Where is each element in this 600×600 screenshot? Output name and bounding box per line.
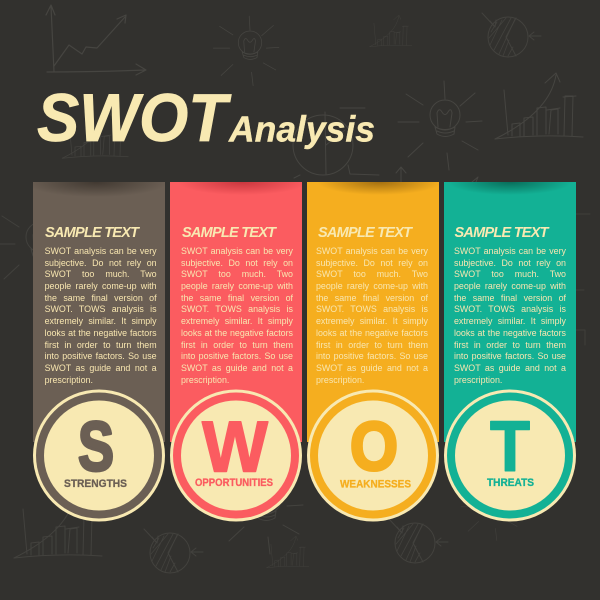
text block: strengths: prescription. [45, 375, 93, 385]
text block: weaknesses: first in order to turn them [316, 340, 428, 350]
text block: threats: SWOT. TOWS analysis is [454, 304, 566, 314]
text block: strengths: people rarely come-up with [45, 281, 157, 291]
sketch: pie chart top [482, 13, 541, 57]
sketch: marks right margin [576, 214, 590, 345]
title: Analysis [228, 108, 375, 150]
text block: threats: prescription. [454, 375, 502, 385]
panel: threats [444, 182, 576, 522]
text block: threats: SWOT analysis can be very [454, 246, 566, 256]
text block: strengths: SWOT too much. Two [45, 269, 157, 279]
text block: weaknesses: SWOT analysis can be very [316, 246, 428, 256]
sketch: pie chart lower right [389, 519, 448, 563]
text block: strengths: looks at the negative factors [45, 328, 157, 338]
title: SWOT [37, 80, 232, 156]
badge: W opportunities: OPPORTUNITIES [195, 477, 273, 489]
text block: strengths: SWOT analysis can be very [45, 246, 157, 256]
sketch: arrows above panels [396, 167, 478, 182]
panel: opportunities [170, 182, 302, 522]
sketch: line chart [46, 5, 146, 75]
text block: weaknesses: subjective. Do not rely on [316, 258, 428, 268]
sketch: large bar chart [495, 73, 583, 139]
text block: opportunities: prescription. [181, 375, 229, 385]
text block: opportunities: people rarely come-up with [181, 281, 293, 291]
text block: threats: extremely similar. It simply [454, 316, 566, 326]
text block: opportunities: extremely similar. It simply [181, 316, 293, 326]
badge: S strengths [33, 390, 165, 522]
text block: weaknesses: the same final version of [316, 293, 428, 303]
panel: strengths [33, 182, 165, 522]
text block: weaknesses: into positive factors. So use [316, 351, 428, 361]
text block: weaknesses: SWOT as guide and not a [316, 363, 428, 373]
badge: W opportunities [170, 390, 302, 522]
text block: strengths: subjective. Do not rely on [45, 258, 157, 268]
text block: threats: into positive factors. So use [454, 351, 566, 361]
text block: weaknesses: looks at the negative factors [316, 328, 428, 338]
text block: opportunities: first in order to turn them [181, 340, 293, 350]
text block: opportunities: into positive factors. So use [181, 351, 293, 361]
text block: threats: first in order to turn them [454, 340, 566, 350]
text block: strengths: first in order to turn them [45, 340, 157, 350]
text block: threats: SWOT too much. Two [454, 269, 566, 279]
text block: threats: SWOT as guide and not a [454, 363, 566, 373]
text block: threats [454, 246, 566, 385]
text block: strengths: SWOT as guide and not a [45, 363, 157, 373]
sketch: small bar chart top [370, 15, 412, 47]
text block: threats: looks at the negative factors [454, 328, 566, 338]
sketch: bar chart lower left [14, 492, 102, 558]
text block: strengths: SWOT. TOWS analysis is [45, 304, 157, 314]
badge: S strengths: STRENGTHS [64, 478, 127, 490]
text block: weaknesses: people rarely come-up with [316, 281, 428, 291]
panel: weaknesses [307, 182, 439, 522]
text block: strengths: the same final version of [45, 293, 157, 303]
text block: strengths: extremely similar. It simply [45, 316, 157, 326]
text block: weaknesses [316, 246, 428, 385]
sketch: light bulb under T [461, 478, 520, 540]
text block: opportunities: SWOT analysis can be very [181, 246, 293, 256]
badge: O weaknesses [307, 390, 439, 522]
sketch: bar chart behind title [62, 109, 128, 158]
sketch: pie chart lower left [144, 529, 203, 573]
text block: threats: people rarely come-up with [454, 281, 566, 291]
title [37, 80, 375, 156]
sketch: pie chart behind title [293, 108, 379, 178]
text block: strengths: into positive factors. So use [45, 351, 157, 361]
text block: opportunities: subjective. Do not rely on [181, 258, 293, 268]
badge: O weaknesses: O [350, 408, 398, 485]
text block: opportunities: looks at the negative factors [181, 328, 293, 338]
text block: weaknesses: SWOT too much. Two [316, 269, 428, 279]
badge: S strengths: S [78, 408, 114, 486]
heading: weaknesses: SAMPLE TEXT [318, 225, 411, 241]
text block: opportunities: SWOT too much. Two [181, 269, 293, 279]
sketch: small bar chart lower [267, 536, 309, 568]
badge: T threats: T [490, 408, 530, 487]
text block: opportunities: SWOT. TOWS analysis is [181, 304, 293, 314]
text block: weaknesses: SWOT. TOWS analysis is [316, 304, 428, 314]
heading: opportunities: SAMPLE TEXT [182, 225, 275, 241]
sketch: large light bulb [398, 81, 482, 170]
badge: T threats: THREATS [487, 477, 534, 489]
heading: threats: SAMPLE TEXT [454, 225, 548, 241]
text block: weaknesses: extremely similar. It simply [316, 316, 428, 326]
text block: threats: subjective. Do not rely on [454, 258, 566, 268]
sketch: light bulb under W [219, 465, 303, 554]
heading: strengths: SAMPLE TEXT [45, 225, 138, 241]
badge: O weaknesses: WEAKNESSES [340, 478, 411, 490]
sketch: light bulb left [0, 203, 78, 292]
text block: opportunities: SWOT as guide and not a [181, 363, 293, 373]
badge: W opportunities: W [202, 408, 268, 488]
text block: weaknesses: prescription. [316, 375, 364, 385]
text block: threats: the same final version of [454, 293, 566, 303]
badge: T threats [444, 390, 576, 522]
sketch: light bulb top [213, 16, 279, 86]
text block: strengths [44, 246, 157, 385]
text block: opportunities [181, 246, 293, 385]
text block: opportunities: the same final version of [181, 293, 293, 303]
